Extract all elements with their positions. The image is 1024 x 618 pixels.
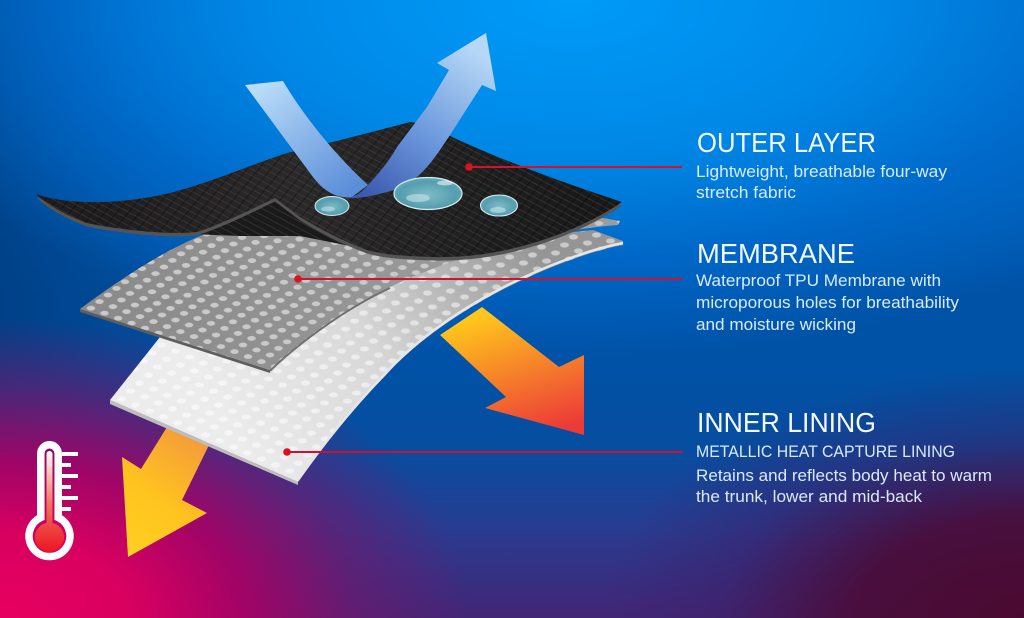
leader: inner lining [283,448,683,456]
inner lining layer [110,230,623,485]
outer layer surface [36,122,622,257]
heading: inner lining: INNER LINING [697,407,876,438]
icon: thermometer [29,445,78,557]
description: outer layer: stretch fabric [696,183,797,202]
leader: outer layer [465,163,682,171]
arrow: moisture bouncing off and vapour escaping [245,33,496,198]
leader: membrane [294,275,682,283]
description: membrane: microporous holes for breathability [696,293,959,312]
description: inner lining [696,466,992,506]
heading: outer layer: OUTER LAYER [697,127,876,158]
membrane layer [80,216,620,373]
text block: inner lining [696,407,992,506]
heading: membrane: MEMBRANE [697,238,855,269]
water droplets [315,178,518,216]
description: outer layer [696,162,948,202]
description: inner lining: the trunk, lower and mid-back [696,487,922,506]
subheading: metallic heat capture lining: METALLIC HEAT CAPTURE LINING [696,442,955,461]
description: outer layer: Lightweight, breathable four-way [696,162,948,181]
droplet left [315,196,349,216]
description: membrane: and moisture wicking [696,315,856,334]
fold underside [190,198,350,246]
description: inner lining: Retains and reflects body heat to warm [696,466,992,485]
droplet right [480,195,518,216]
arrow: heat reflected to right [440,307,584,435]
description: membrane: Waterproof TPU Membrane with [696,271,941,290]
outer layer edge [36,126,622,261]
description: membrane [696,271,959,334]
text block: membrane [696,238,959,334]
droplet centre [394,178,462,210]
arrow: heat reflected to lower left [122,427,210,557]
outer layer [36,122,622,261]
text block: outer layer [696,127,948,202]
